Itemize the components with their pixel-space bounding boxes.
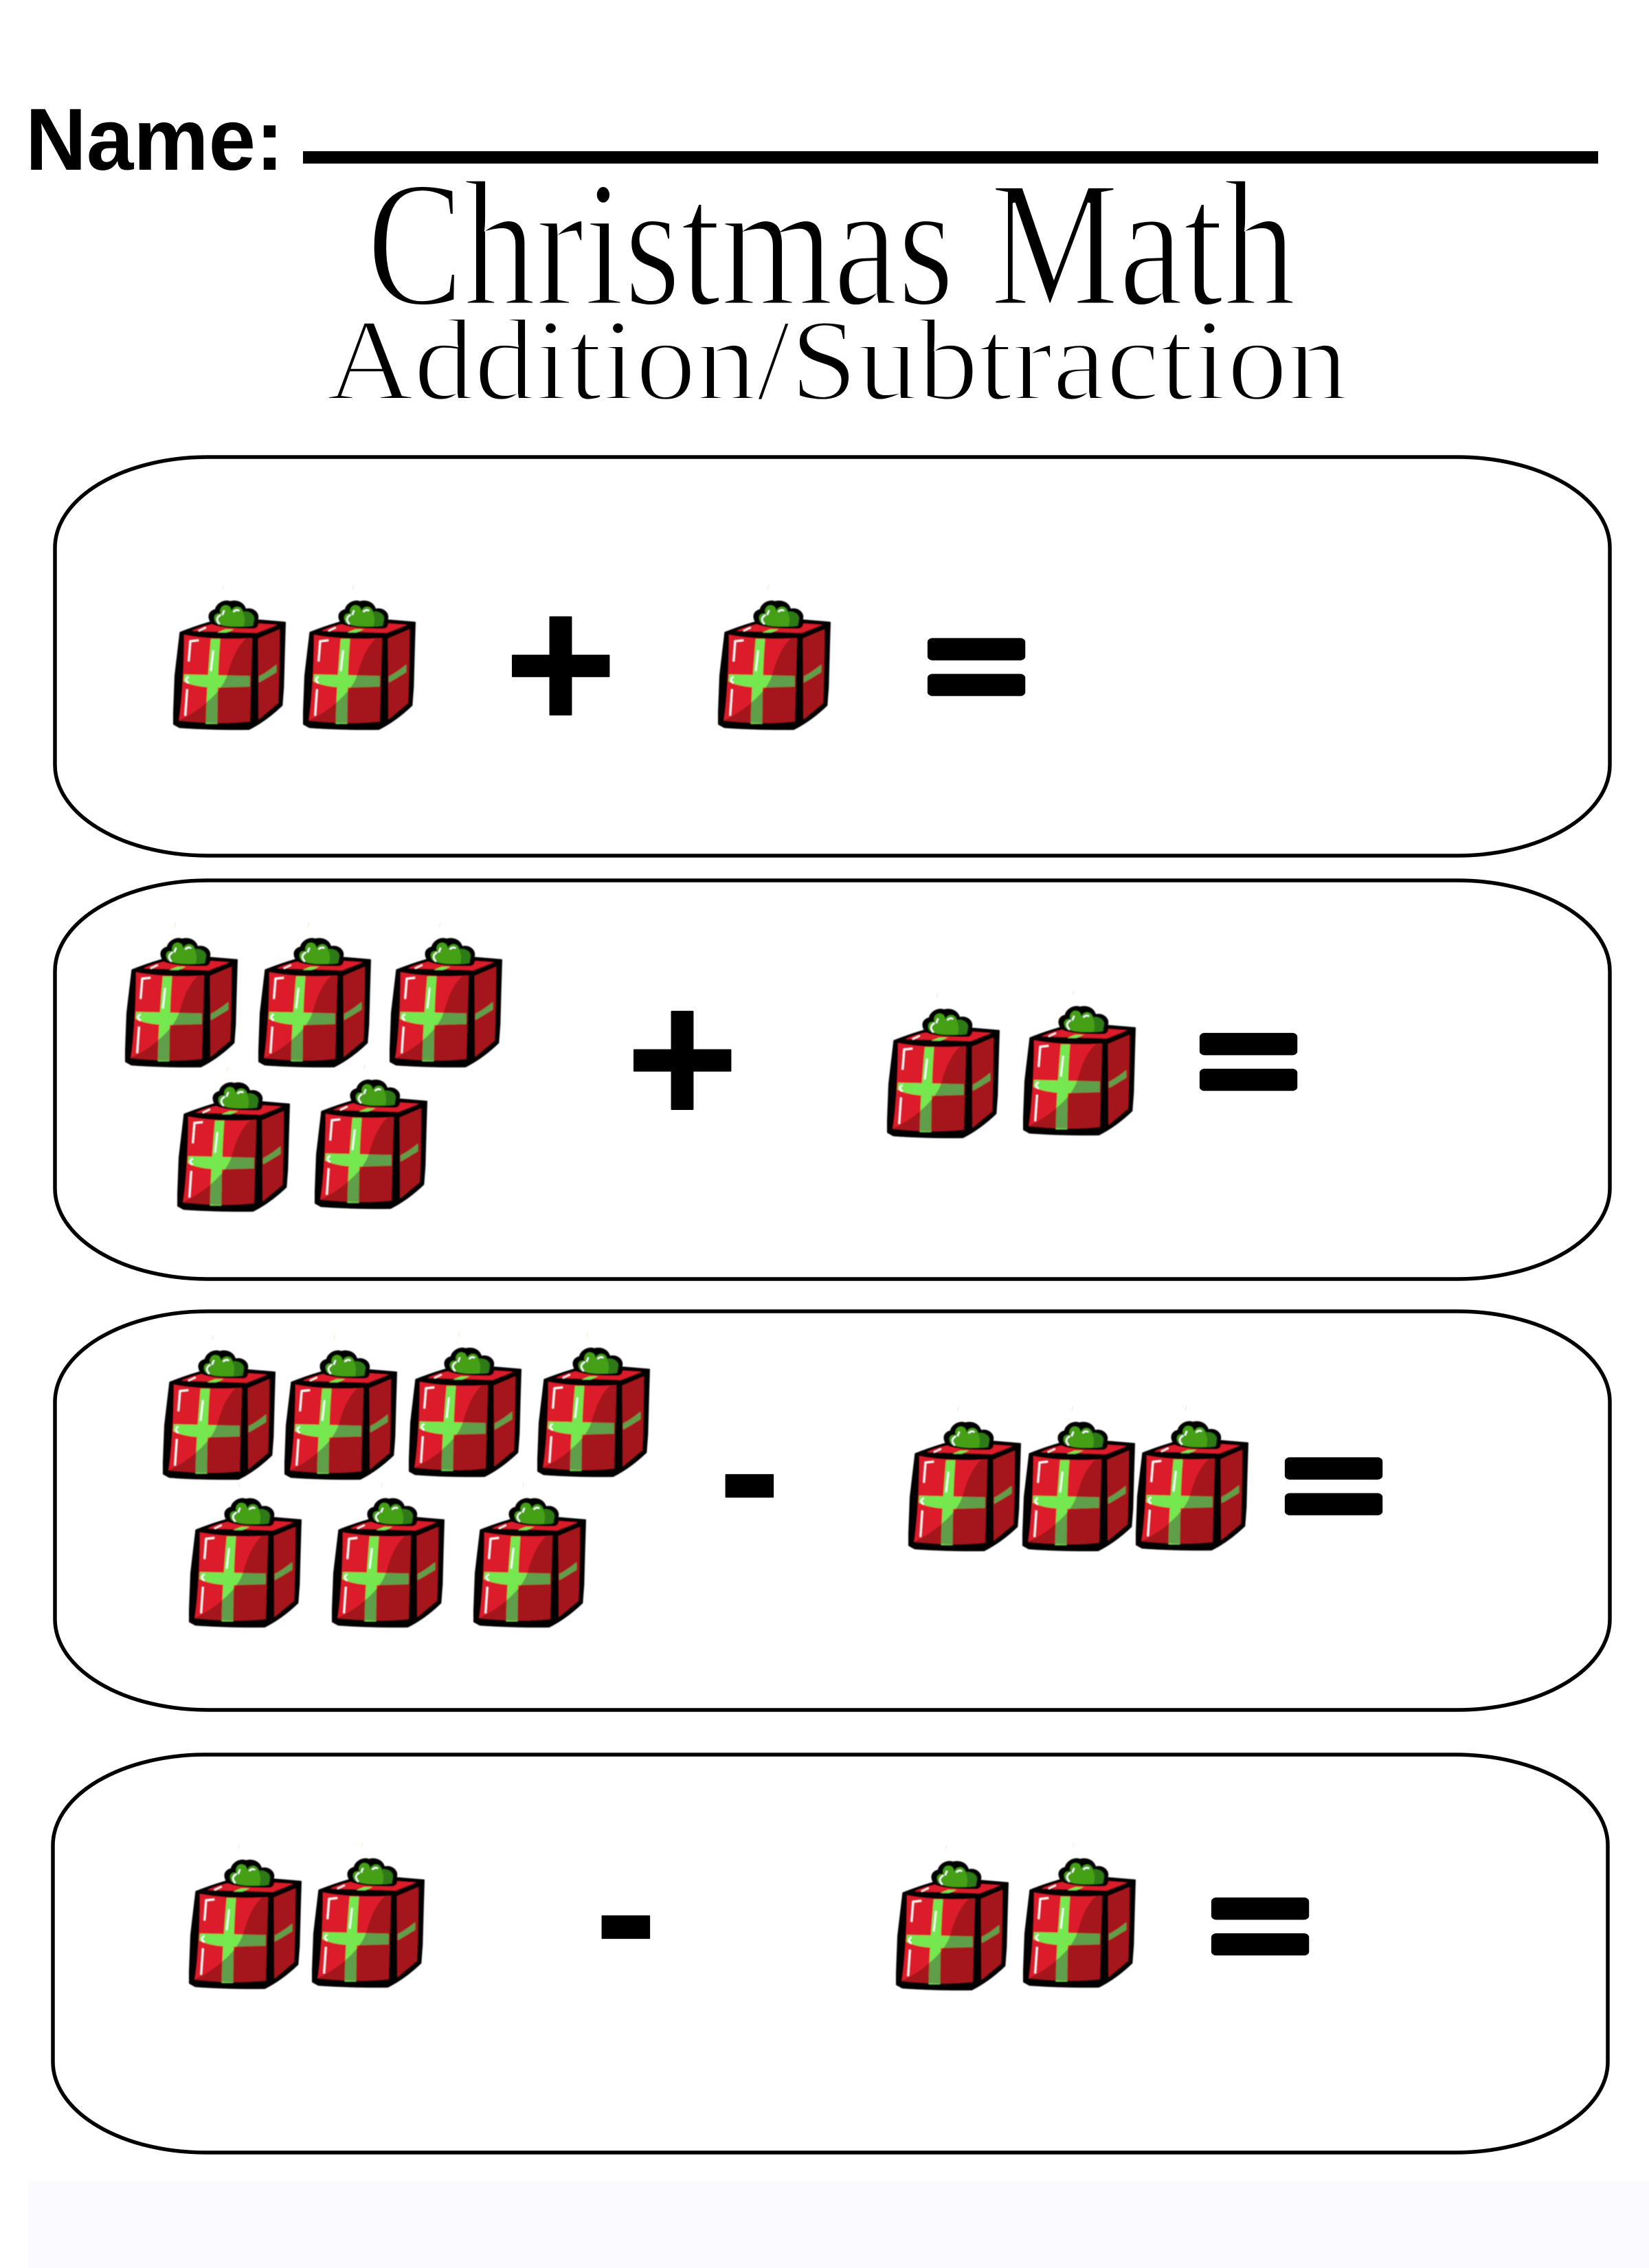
plus sign: + [504,557,617,771]
minus sign: - [719,1367,781,1574]
icons: 2 gifts [190,1843,424,1988]
equals sign: = [1209,1850,1311,1999]
panel 4 outline [53,1755,1608,2153]
equals sign: = [1198,986,1299,1134]
panel 2 outline [55,880,1610,1279]
icons: 2 gifts [888,990,1135,1137]
minus sign: - [595,1808,657,2015]
icons: 7 gifts [164,1332,649,1627]
panel 1 outline [55,457,1610,856]
icons: 2 gifts [174,585,415,729]
icon: 1 gift [719,585,830,729]
name write-in line [303,151,1598,164]
panel: problem 4 [53,1755,1608,2153]
bottom tinted band [28,2181,1649,2268]
equals sign: = [1283,1410,1384,1559]
title: Christmas Math [367,144,1296,344]
icons: 3 gifts [909,1405,1248,1550]
panel: problem 3 [55,1311,1610,1710]
icons: 2 gifts [897,1843,1135,1990]
panel: problem 2 [55,880,1610,1279]
subtitle: Addition/Subtraction [326,296,1348,425]
panel 3 outline [55,1311,1610,1710]
plus sign: + [626,951,739,1166]
icons: 5 gifts [126,922,502,1211]
equals sign: = [926,591,1027,740]
name label: Name: [25,91,284,189]
panel: problem 1 [55,457,1610,856]
